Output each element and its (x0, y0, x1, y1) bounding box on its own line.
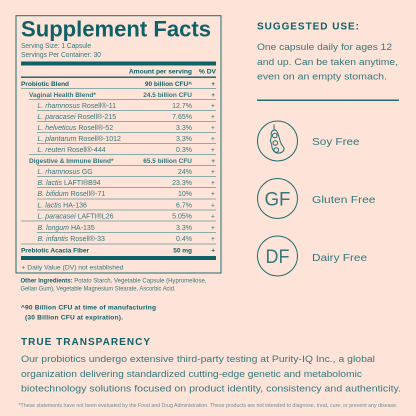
transparency paragraph: biotechnology solutions focused on product identity, consistency and authenticity. (21, 384, 401, 394)
serving information: Servings Per Container: 30 (21, 52, 101, 59)
row: b. bifidum rosell-71: + (211, 191, 215, 198)
icon: gluten free (258, 178, 298, 218)
row: digestive and immune blend: Digestive & Immune Blend* (29, 158, 114, 165)
row: l. helveticus rosell-52: L. helveticus Rosell®-52 (38, 124, 113, 132)
row: l. plantarum rosell-1012: 3.3% (176, 136, 192, 143)
row: b. longum ha-135: 3.3% (176, 225, 192, 232)
suggested use text: One capsule daily for ages 12 (257, 42, 392, 53)
suggested use text: even on an empty stomach. (257, 72, 387, 82)
row: digestive and immune blend: 65.5 billion CFU (143, 158, 192, 165)
row: b. lactis lafti b94 (38, 179, 215, 187)
icon: dairy free (258, 236, 298, 276)
row: l. reuteri rosell-444 (38, 146, 215, 154)
row: prebiotic acacia fiber: 50 mg (173, 248, 192, 254)
daily value footnote: + Daily Value (DV) not established (22, 264, 124, 272)
row: l. rhamnosus gg: 24% (178, 169, 192, 176)
row: vaginal health blend (29, 92, 215, 99)
row: probiotic blend (21, 80, 215, 88)
row: l. plantarum rosell-1012: L. plantarum Rosell®-1012 (38, 135, 121, 143)
row: prebiotic acacia fiber (21, 248, 215, 254)
row: l. lactis ha-136: + (211, 202, 215, 210)
cfu note: ^90 Billion CFU at time of manufacturing (21, 304, 156, 312)
suggested use text: and up. Can be taken anytime, (257, 57, 398, 68)
row: l. rhamnosus gg (38, 169, 215, 176)
heading: true transparency: TRUE TRANSPARENCY (21, 337, 150, 348)
cfu note: (30 Billion CFU at expiration). (25, 314, 123, 322)
table rows (21, 80, 216, 254)
row: vaginal health blend: 24.5 billion CFU (143, 92, 192, 99)
icon: soy free (258, 121, 298, 161)
row: b. longum ha-135: + (211, 225, 215, 232)
row: l. lactis ha-136 (38, 202, 215, 210)
row: l. reuteri rosell-444: + (211, 147, 215, 154)
label: soy free: Soy Free (312, 136, 360, 148)
panel: supplement facts (16, 16, 221, 273)
row: b. infantis rosell-33 (38, 235, 215, 243)
transparency paragraph (21, 354, 401, 394)
cfu note (21, 304, 156, 322)
row: l. paracasei lafti l26 (38, 212, 215, 220)
row: l. plantarum rosell-1012 (38, 135, 215, 143)
row: b. infantis rosell-33: + (211, 236, 215, 243)
table header: % DV (199, 68, 217, 76)
row: l. rhamnosus gg: L. rhamnosus GG (38, 169, 93, 176)
icon: dairy free: DF (266, 247, 290, 268)
divider (257, 100, 399, 101)
row: l. paracasei rosell-215 (38, 113, 215, 121)
suggested use text (257, 42, 398, 82)
row: vaginal health blend: + (211, 92, 215, 99)
serving information: Serving Size: 1 Capsule (21, 43, 91, 50)
table header: Amount per serving (129, 68, 192, 76)
row: digestive and immune blend (29, 158, 215, 165)
row: l. paracasei rosell-215: L. paracasei Rosell®-215 (38, 113, 116, 121)
row: b. bifidum rosell-71: 10% (178, 191, 192, 198)
row: l. reuteri rosell-444: L. reuteri Rosell®-444 (38, 146, 106, 154)
row: l. helveticus rosell-52: + (211, 125, 215, 132)
row: digestive and immune blend: + (211, 158, 215, 165)
row: probiotic blend: Probiotic Blend (21, 81, 69, 88)
row: probiotic blend: 90 billion CFU^ (145, 80, 192, 88)
transparency paragraph: Our probiotics undergo extensive third-party testing at Purity-IQ Inc., a global (21, 354, 375, 365)
row: b. lactis lafti b94: + (211, 180, 215, 187)
other ingredients: Other Ingredients: Potato Starch, Vegetable Capsule (Hypromellose, (20, 278, 207, 284)
row: l. helveticus rosell-52 (38, 124, 215, 132)
row: vaginal health blend: Vaginal Health Blend* (29, 92, 96, 99)
row: probiotic blend: + (211, 81, 215, 88)
row: l. lactis ha-136: 6.7% (176, 202, 192, 210)
row: b. infantis rosell-33: 0.4% (176, 236, 192, 243)
row: l. paracasei lafti l26: 5.05% (172, 214, 192, 220)
row: l. rhamnosus rosell-11 (38, 102, 215, 110)
other ingredients: Gellan Gum), Vegetable Magnesium Stearate, Ascorbic Acid. (20, 286, 176, 292)
row: l. rhamnosus gg: + (211, 169, 215, 176)
heading: suggested use: SUGGESTED USE: (257, 22, 359, 32)
row: b. bifidum rosell-71: B. bifidum Rosell®-71 (38, 190, 105, 198)
row: b. infantis rosell-33: B. infantis Rosell®-33 (38, 235, 105, 243)
row: l. paracasei lafti l26: L. paracasei LAFTI®L26 (38, 212, 114, 220)
other ingredients (20, 278, 207, 292)
row: l. lactis ha-136: L. lactis HA-136 (38, 202, 87, 210)
row: l. rhamnosus rosell-11: L. rhamnosus Rosell®-11 (38, 102, 116, 110)
serving information (21, 43, 101, 59)
row: prebiotic acacia fiber: + (211, 248, 215, 254)
row: l. rhamnosus rosell-11: + (211, 103, 215, 110)
thick top rule (21, 62, 216, 66)
row: b. bifidum rosell-71 (38, 190, 215, 198)
transparency paragraph: organization delivering standardized cutting-edge genetic and metabolomic (21, 369, 362, 380)
row: l. plantarum rosell-1012: + (211, 136, 215, 143)
row: b. lactis lafti b94: 23.3% (172, 180, 192, 187)
label: gluten free: Gluten Free (312, 194, 376, 206)
row: b. lactis lafti b94: B. lactis LAFTI®B94 (38, 179, 101, 187)
thick bottom rule (21, 256, 216, 260)
row: prebiotic acacia fiber: Prebiotic Acacia Fiber (21, 248, 90, 254)
row: b. longum ha-135 (38, 225, 215, 232)
row: l. paracasei rosell-215: + (211, 114, 215, 121)
row: b. longum ha-135: B. longum HA-135 (38, 225, 95, 232)
row: l. paracasei rosell-215: 7.65% (172, 114, 192, 121)
row: l. helveticus rosell-52: 3.3% (176, 125, 192, 132)
row: l. rhamnosus rosell-11: 12.7% (172, 103, 192, 110)
fda disclaimer: *These statements have not been evaluated by the Food and Drug Administration. These products are not intended to diagnose, treat, cure, or prevent any disease. (18, 403, 398, 409)
row: l. reuteri rosell-444: 0.3% (176, 147, 192, 154)
row: l. paracasei lafti l26: + (211, 214, 215, 220)
heading: supplement facts: Supplement Facts (21, 16, 211, 42)
icon: gluten free: GF (264, 190, 290, 210)
label: dairy free: Dairy Free (312, 252, 367, 264)
